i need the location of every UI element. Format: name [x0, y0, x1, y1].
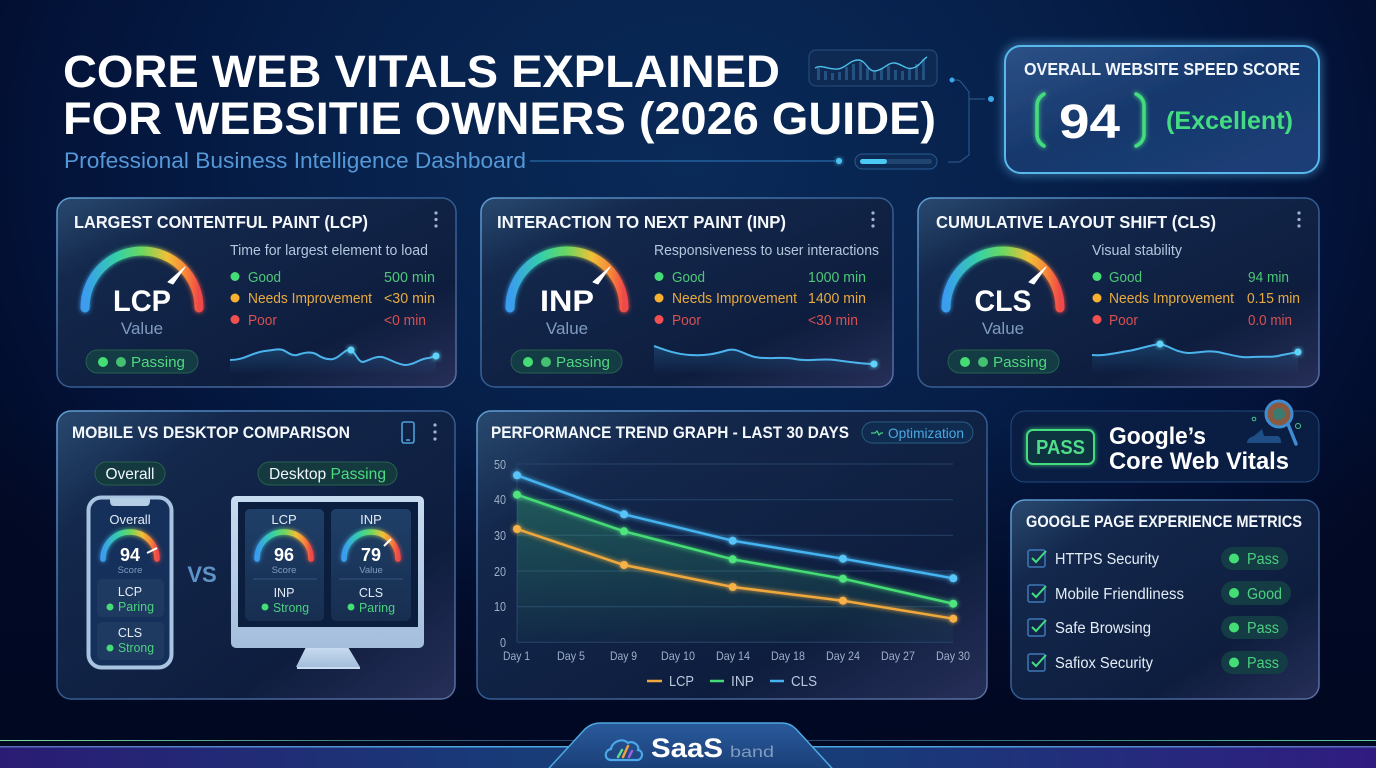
metric: HTTPS security: [1028, 547, 1288, 570]
LCP thresholds: <30 min: [384, 291, 435, 307]
metric: HTTPS security: Pass: [1247, 551, 1279, 568]
line chart: Day 1: [503, 649, 530, 663]
CLS thresholds: 0.0 min: [1248, 313, 1292, 329]
metric: safe browsing: Pass: [1247, 620, 1279, 637]
LCP heading: LARGEST CONTENTFUL PAINT (LCP): [74, 212, 368, 232]
phone LCP card: Paring: [118, 600, 154, 614]
footer tab: band: [730, 744, 774, 761]
chart legend: [647, 673, 817, 690]
metric: safiox security: Safiox Security: [1055, 655, 1153, 672]
desktop monitor: [231, 496, 424, 669]
INP thresholds: 1400 min: [808, 291, 866, 307]
phone LCP card: LCP: [118, 585, 142, 599]
line chart: Day 30: [936, 649, 970, 663]
metric: mobile friendliness: Mobile Friendliness: [1055, 586, 1184, 603]
panel: INP: [481, 198, 893, 387]
metric: mobile friendliness: [1028, 581, 1291, 605]
line chart: 30: [494, 528, 506, 543]
chart legend: INP: [731, 673, 754, 690]
line chart: Day 27: [881, 649, 915, 663]
desktop INP card: INP: [360, 512, 382, 527]
line chart: 40: [494, 492, 506, 507]
LCP thresholds: Poor: [248, 313, 277, 329]
badge title: Core Web Vitals: [1109, 448, 1289, 475]
CLS series: [513, 471, 957, 582]
phone gauge: [103, 532, 157, 576]
icon: magnifier: [1247, 401, 1300, 444]
overall pill: [95, 462, 165, 485]
INP gauge: INP: [540, 285, 594, 318]
LCP status pill: [86, 350, 198, 373]
metric: safe browsing: [1028, 616, 1288, 639]
INP gauge: Value: [546, 319, 588, 338]
line chart: Day 18: [771, 649, 805, 663]
INP thresholds: Good: [672, 270, 705, 286]
desktop LCP card: [245, 509, 324, 621]
icon: smartphone: [402, 422, 414, 443]
optimization pill: Optimization: [888, 425, 964, 441]
CLS thresholds: Poor: [1109, 313, 1138, 329]
desktop INP card: 79: [361, 545, 381, 565]
desktop LCP card: 96: [274, 545, 294, 565]
line chart: 20: [494, 564, 506, 579]
icon: cloud logo: [606, 740, 642, 760]
desktop INP card: [331, 509, 411, 621]
desktop LCP card: INP: [274, 586, 294, 600]
panel: CLS: [918, 198, 1319, 387]
CLS heading: CUMULATIVE LAYOUT SHIFT (CLS): [936, 212, 1216, 232]
LCP thresholds: Needs Improvement: [248, 291, 372, 307]
title: FOR WEBSITIE OWNERS (2026 GUIDE): [63, 93, 936, 144]
INP thresholds: 1000 min: [808, 270, 866, 286]
pass badge: [1027, 430, 1094, 464]
panel: overall website speed score: [1005, 46, 1319, 173]
trend heading: PERFORMANCE TREND GRAPH - LAST 30 DAYS: [491, 423, 849, 442]
LCP status pill: Passing: [131, 354, 185, 371]
panel: mobile vs desktop: [57, 411, 455, 699]
INP sparkline: [654, 346, 878, 374]
CLS status pill: [948, 350, 1059, 373]
INP thresholds: <30 min: [808, 313, 858, 329]
menu dots: [871, 211, 875, 228]
desktop INP card: CLS: [359, 586, 383, 600]
desktop INP card: Paring: [359, 601, 395, 615]
logo wordmark: SaaS: [651, 733, 723, 763]
CLS status pill: Passing: [993, 354, 1047, 371]
pass badge: PASS: [1036, 437, 1085, 459]
metric: mobile friendliness: Good: [1247, 586, 1282, 603]
metric: HTTPS security: HTTPS Security: [1055, 551, 1159, 568]
LCP series: [513, 525, 957, 623]
phone CLS card: Strong: [118, 641, 154, 655]
chart legend: CLS: [791, 673, 817, 690]
comparison heading: MOBILE VS DESKTOP COMPARISON: [72, 423, 350, 442]
LCP description: Time for largest element to load: [230, 243, 428, 259]
score number: 94: [1059, 96, 1120, 149]
LCP thresholds: <0 min: [384, 313, 426, 329]
metric: safe browsing: Safe Browsing: [1055, 620, 1151, 637]
CLS thresholds: 0.15 min: [1247, 291, 1300, 307]
subtitle: Professional Business Intelligence Dashboard: [64, 148, 526, 173]
LCP thresholds: Good: [248, 270, 281, 286]
score rating: (Excellent): [1166, 107, 1293, 135]
INP thresholds: Needs Improvement: [672, 291, 797, 307]
title: [63, 46, 936, 144]
desktop INP card: Value: [359, 565, 383, 576]
line chart: Day 14: [716, 649, 750, 663]
phone CLS card: [97, 622, 164, 660]
phone gauge: Score: [118, 565, 142, 576]
CLS description: Visual stability: [1092, 243, 1183, 259]
CLS gauge: Value: [982, 319, 1024, 338]
phone LCP card: [97, 579, 164, 617]
metrics heading: GOOGLE PAGE EXPERIENCE METRICS: [1026, 512, 1302, 531]
INP thresholds: Poor: [672, 313, 701, 329]
INP gauge: [510, 251, 624, 338]
INP status pill: Passing: [556, 354, 610, 371]
panel: Google pass badge: [1011, 401, 1319, 482]
LCP thresholds: [230, 270, 435, 329]
phone: [88, 498, 172, 668]
mini chart badge: [809, 50, 937, 86]
desktop passing pill: [258, 462, 397, 485]
LCP sparkline: [230, 346, 440, 374]
panel: LCP: [57, 198, 456, 387]
line chart: [494, 457, 970, 663]
panel: page experience metrics: [1011, 500, 1319, 699]
score heading: OVERALL WEBSITE SPEED SCORE: [1024, 59, 1300, 79]
phone gauge: 94: [120, 545, 140, 565]
title: CORE WEB VITALS EXPLAINED: [63, 46, 780, 97]
phone CLS card: CLS: [118, 626, 142, 640]
CLS thresholds: Needs Improvement: [1109, 291, 1234, 307]
metric: safiox security: Pass: [1247, 655, 1279, 672]
INP heading: INTERACTION TO NEXT PAINT (INP): [497, 212, 786, 232]
phone: Overall: [109, 512, 151, 527]
INP status pill: [511, 350, 622, 373]
desktop LCP card: LCP: [271, 512, 297, 527]
footer bar: [0, 723, 1376, 768]
metric: safiox security: [1028, 651, 1288, 674]
panel: performance trend: [477, 411, 987, 699]
line chart: Day 10: [661, 649, 695, 663]
LCP gauge: [85, 251, 199, 338]
overall pill: Overall: [106, 466, 154, 483]
CLS gauge: CLS: [974, 285, 1032, 318]
CLS thresholds: Good: [1109, 270, 1142, 286]
CLS thresholds: [1092, 270, 1300, 329]
desktop LCP card: Score: [272, 565, 296, 576]
LCP gauge: LCP: [113, 285, 171, 318]
badge title: [1109, 423, 1289, 475]
CLS thresholds: 94 min: [1248, 270, 1289, 286]
line chart: 50: [494, 457, 506, 472]
desktop passing pill: Desktop Passing: [269, 466, 386, 483]
line chart: Day 5: [557, 649, 585, 663]
score brackets: [1037, 94, 1144, 146]
VS label: VS: [187, 562, 217, 587]
menu dots: [434, 211, 438, 228]
INP series: [513, 491, 957, 608]
LCP thresholds: 500 min: [384, 270, 435, 286]
menu dots: [433, 423, 437, 441]
INP thresholds: [654, 270, 866, 329]
line chart: 0: [500, 635, 506, 650]
line chart: 10: [494, 599, 506, 614]
CLS gauge: [946, 251, 1060, 338]
line chart: Day 24: [826, 649, 860, 663]
badge title: Google’s: [1109, 423, 1206, 450]
LCP gauge: Value: [121, 319, 163, 338]
optimization pill: [862, 422, 973, 443]
chart legend: LCP: [669, 673, 694, 690]
menu dots: [1297, 211, 1301, 228]
INP description: Responsiveness to user interactions: [654, 243, 879, 259]
desktop LCP card: Strong: [273, 601, 309, 615]
CLS sparkline: [1092, 340, 1302, 374]
footer tab: [540, 723, 841, 768]
line chart: Day 9: [610, 649, 637, 663]
header decoration: line, slider and connector: [530, 78, 994, 169]
